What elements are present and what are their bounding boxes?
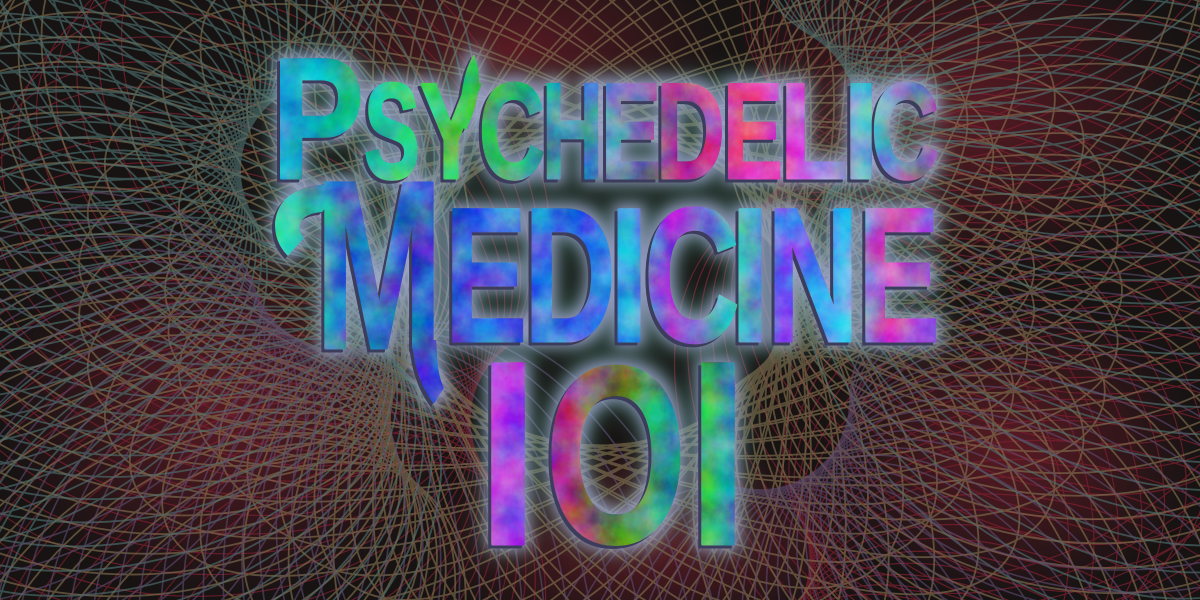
swash: M tail bbox=[412, 340, 444, 404]
title line: Psychedelic: C bbox=[479, 55, 545, 207]
title line: Psychedelic: P bbox=[272, 23, 364, 215]
title line: 101: I bbox=[478, 307, 538, 600]
title: Psychedelic Medicine 101 bbox=[272, 23, 940, 600]
title line: Psychedelic: Y bbox=[420, 55, 482, 207]
title line: Psychedelic: H bbox=[542, 55, 603, 207]
title line: Medicine: I bbox=[730, 169, 770, 382]
title line: Psychedelic: L bbox=[780, 55, 848, 207]
title line: Psychedelic bbox=[272, 23, 939, 215]
title line: Medicine: E bbox=[445, 169, 527, 382]
title line: 101 bbox=[478, 307, 748, 600]
title line: Medicine: C bbox=[644, 169, 740, 382]
title line: Medicine bbox=[275, 131, 940, 404]
title line: 101: I bbox=[688, 307, 748, 600]
swash: M hook bbox=[275, 185, 345, 256]
title line: Medicine: M bbox=[315, 131, 443, 399]
swash: Y flourish bbox=[452, 54, 479, 130]
title line: Medicine: E bbox=[858, 169, 940, 382]
title line: Psychedelic: D bbox=[656, 55, 725, 207]
title line: Psychedelic: E bbox=[601, 55, 661, 207]
title line: Psychedelic: S bbox=[364, 55, 420, 207]
title line: Psychedelic: C bbox=[871, 55, 939, 207]
title line: Medicine: N bbox=[767, 169, 859, 382]
title line: Psychedelic: I bbox=[843, 55, 879, 207]
title line: Psychedelic: E bbox=[723, 55, 783, 207]
title line: 101: O bbox=[545, 315, 687, 596]
title line: Medicine: I bbox=[609, 169, 649, 382]
title line: Medicine: D bbox=[524, 169, 616, 382]
